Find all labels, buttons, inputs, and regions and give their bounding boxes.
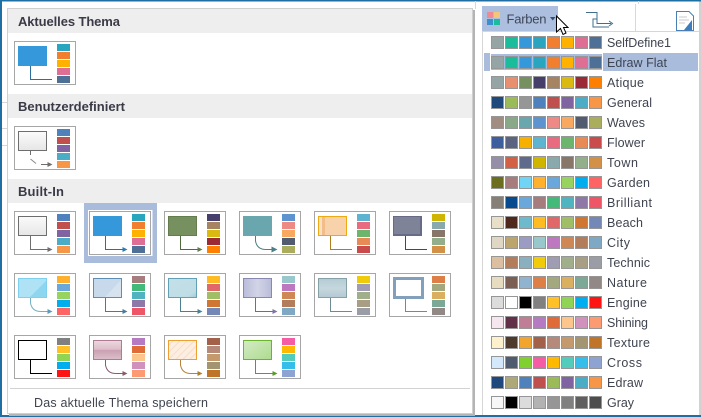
palette row: Garden (492, 176, 650, 190)
heading: Aktuelles Thema (8, 9, 472, 33)
palette row: Waves (492, 116, 645, 130)
thumbnail: built-in 2 selected (90, 212, 150, 254)
heading: Built-In (8, 179, 472, 203)
thumbnail: built-in 10 (240, 274, 300, 316)
palette row: Technic (492, 256, 650, 270)
thumbnail: built-in 9 (164, 274, 226, 316)
palette row: Garden: Garden (607, 176, 650, 190)
thumbnail: built-in 7 (14, 274, 76, 316)
toolbar icon: document (676, 12, 694, 30)
thumbnail: current theme (14, 42, 76, 84)
palette row: Atique (492, 76, 644, 90)
thumbnail: built-in 6 (390, 212, 450, 254)
palette row: Atique: Atique (607, 76, 644, 90)
heading: Built-In: Built-In (18, 184, 64, 199)
palette row: Edraw: Edraw (607, 376, 644, 390)
palette row: Edraw (492, 376, 644, 390)
thumbnail: built-in 3 (164, 212, 226, 254)
palette row: City: City (607, 236, 631, 250)
palette row: Brilliant (492, 196, 653, 210)
palette row: General: General (607, 96, 652, 110)
palette row: Town (492, 156, 638, 170)
palette row: Shining: Shining (607, 316, 648, 330)
heading: Aktuelles Thema: Aktuelles Thema (18, 14, 121, 29)
thumbnail: built-in 8 (90, 274, 150, 316)
palette row: Texture (492, 336, 650, 350)
palette row: Beach (492, 216, 643, 230)
palette row: Edraw Flat: Edraw Flat (607, 56, 668, 70)
mouse cursor (556, 16, 568, 34)
palette row: Waves: Waves (607, 116, 645, 130)
palette row: Flower: Flower (607, 136, 645, 150)
panel: theme gallery (8, 8, 475, 416)
palette row: Technic: Technic (607, 256, 650, 270)
thumbnail: built-in 11 (314, 274, 376, 316)
palette row: Gray (492, 396, 635, 410)
thumbnail: built-in 14 (90, 336, 150, 378)
palette row: Engine: Engine (607, 296, 647, 310)
palette row: Shining (492, 316, 648, 330)
icon: colour squares (487, 12, 500, 25)
palette row: Flower (492, 136, 645, 150)
palette row: Edraw Flat (492, 56, 668, 70)
palette row: Cross: Cross (607, 356, 642, 370)
palette row: Texture: Texture (607, 336, 650, 350)
thumbnail: built-in 12 (390, 274, 450, 316)
thumbnail: built-in 13 (14, 336, 76, 378)
palette row: City (492, 236, 631, 250)
thumbnail: built-in 5 (314, 212, 376, 254)
selected row highlight (484, 53, 698, 71)
selected theme highlight (84, 203, 157, 263)
palette row: Brilliant: Brilliant (607, 196, 653, 210)
thumbnail: custom theme (14, 126, 76, 170)
palette row: Cross (492, 356, 642, 370)
toolbar icon: connector (586, 12, 612, 27)
heading: Benutzerdefiniert (8, 94, 472, 118)
heading: Benutzerdefiniert: Benutzerdefiniert (18, 99, 126, 114)
thumbnail: built-in 16 (240, 336, 300, 378)
thumbnail: built-in 1 (14, 212, 76, 254)
palette row: Nature (492, 276, 647, 290)
palette row: Nature: Nature (607, 276, 647, 290)
palette row: SelfDefine1 (492, 36, 671, 50)
button: Farben: Farben (506, 12, 546, 26)
palette row: Town: Town (607, 156, 638, 170)
palette row: Engine (492, 296, 647, 310)
palette row: SelfDefine1: SelfDefine1 (607, 36, 671, 50)
button: Farben (482, 6, 558, 31)
panel: colour menu (482, 31, 699, 415)
palette row: General (492, 96, 652, 110)
palette row: Gray: Gray (607, 396, 635, 410)
thumbnail: built-in 15 (164, 336, 226, 378)
thumbnail: built-in 4 (240, 212, 300, 254)
footer: save theme: Das aktuelle Thema speichern (34, 396, 208, 410)
palette row: Beach: Beach (607, 216, 643, 230)
